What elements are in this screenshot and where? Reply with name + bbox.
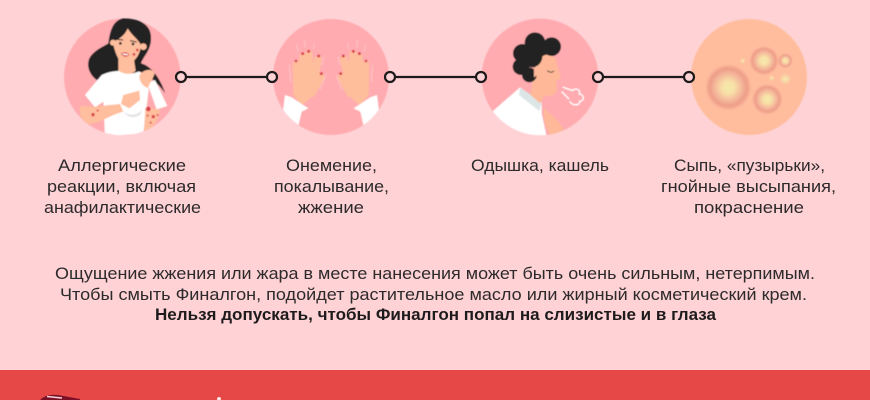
label: numbness: Онемение, — [286, 157, 377, 175]
left hand — [283, 40, 326, 126]
connector: hands to man — [385, 72, 486, 82]
label: allergic reactions: анафилактические — [44, 199, 201, 217]
right hand — [336, 40, 379, 126]
label: rash — [661, 157, 836, 217]
icon: woman with allergic rash — [64, 18, 181, 137]
icon: man coughing — [482, 19, 598, 137]
connector: woman to hands — [176, 72, 277, 82]
label: numbness: покалывание, — [274, 178, 389, 196]
footer band — [0, 370, 870, 400]
text block: warning note: Ощущение жжения или жара в месте нанесения может быть очень сильным, нетерпимым. — [55, 265, 815, 283]
connector: man to blisters — [593, 72, 694, 82]
text block: warning note — [55, 265, 815, 324]
label: allergic reactions: Аллергические — [58, 157, 186, 175]
label: rash: гнойные высыпания, — [661, 178, 836, 196]
label: numbness — [274, 157, 389, 217]
label: rash: Сыпь, «пузырьки», — [674, 157, 825, 175]
icon: tingling hands — [273, 19, 389, 135]
label: allergic reactions: реакции, включая — [47, 178, 196, 196]
label: numbness: жжение — [298, 199, 364, 217]
text block: warning note: Чтобы смыть Финалгон, подойдет растительное масло или жирный косметический крем. — [60, 286, 807, 304]
icon: skin rash blisters — [691, 19, 807, 135]
label: allergic reactions — [44, 157, 201, 217]
text block: warning note: Нельзя допускать, чтобы Финалгон попал на слизистые и в глаза — [155, 306, 717, 324]
label: shortness of breath: Одышка, кашель — [471, 157, 609, 175]
label: rash: покраснение — [694, 199, 804, 217]
